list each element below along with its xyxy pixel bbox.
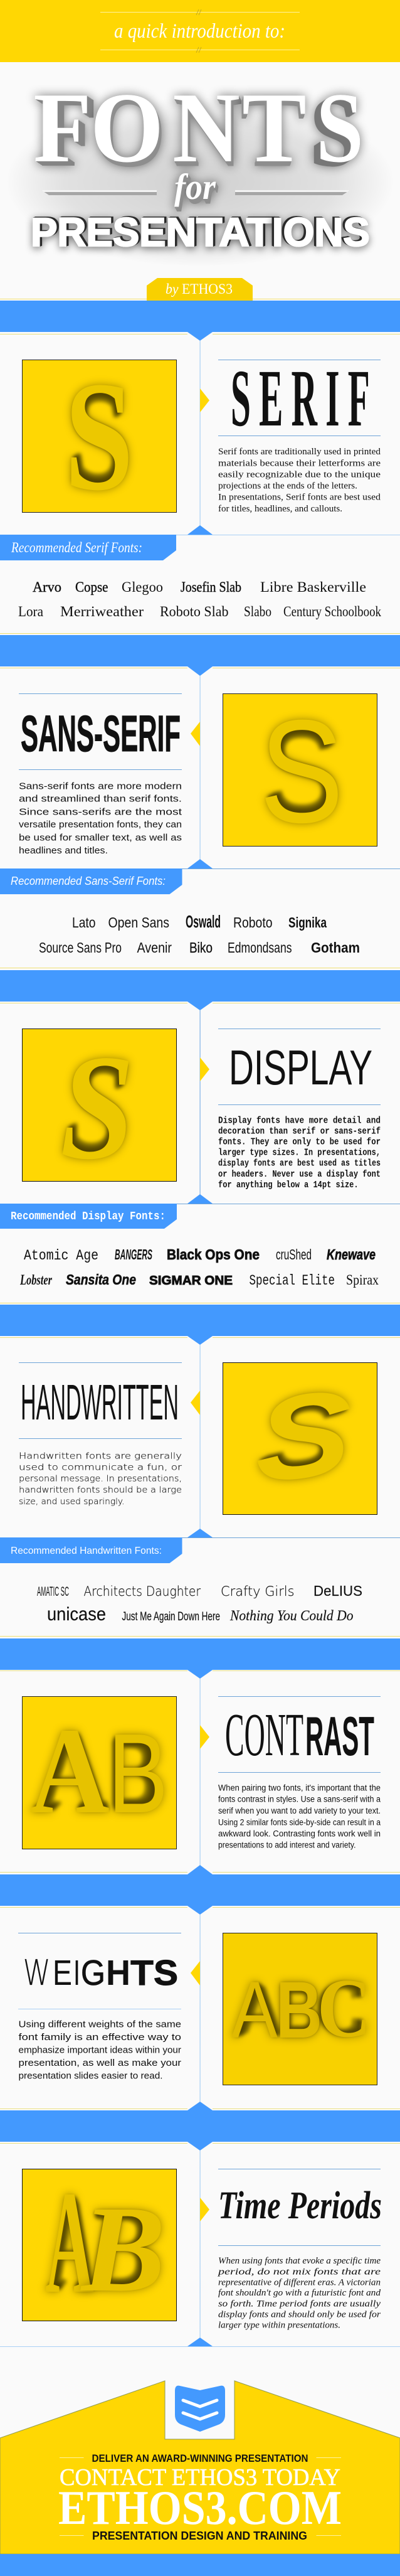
recommended handwritten band <box>0 1537 182 1563</box>
heading: weights: E <box>53 1953 72 1993</box>
weights description: Using different weights of the same <box>19 2020 181 2030</box>
time periods description: so forth. Time period fonts are usually <box>218 2299 381 2309</box>
tile: weights ABC: A <box>235 1967 279 2053</box>
main title: fonts for presentations <box>6 72 394 267</box>
display font samples: Special Elite <box>250 1273 335 1289</box>
time periods description <box>218 2256 381 2331</box>
tile: time periods AB: A <box>55 2174 95 2311</box>
title word FONTS: T <box>242 72 307 183</box>
panel: display <box>23 1010 400 1204</box>
tile: weights ABC: C <box>315 1970 360 2048</box>
sans-serif font samples: Roboto <box>233 914 272 931</box>
handwritten description <box>19 1451 182 1507</box>
display font samples: Knewave <box>327 1246 376 1263</box>
serif description: Serif fonts are traditionally used in printed <box>218 447 381 457</box>
blue band 4 <box>0 1305 400 1345</box>
tile: weights ABC: A <box>243 1972 282 2048</box>
heading: weights: W <box>23 1953 51 1994</box>
tile: handwritten S <box>223 1363 377 1515</box>
serif font samples: Josefin Slab <box>181 579 241 595</box>
sans-serif description: Since sans-serifs are the most <box>19 807 182 817</box>
display description: Display fonts have more detail and <box>218 1116 381 1126</box>
title word FONTS <box>33 72 364 183</box>
contrast description: When pairing two fonts, it's important that the <box>218 1783 381 1792</box>
footer blue strip <box>0 2554 400 2576</box>
sans-serif font samples: Source Sans Pro <box>39 939 122 956</box>
tile: contrast AB: A <box>42 1715 108 1827</box>
tile: weights ABC: B <box>277 1967 321 2053</box>
serif font samples: Libre Baskerville <box>260 579 366 595</box>
tile: handwritten S: S <box>259 1369 348 1503</box>
time periods description: larger type within presentations. <box>218 2321 340 2331</box>
serif description: for titles, headlines, and callouts. <box>218 504 342 514</box>
heading: weights <box>18 1933 181 2009</box>
serif font samples: Glegoo <box>122 579 163 595</box>
title word for: for <box>174 166 216 207</box>
tile: handwritten S: S <box>256 1365 351 1508</box>
recommended handwritten band: Recommended Handwritten Fonts: <box>11 1546 162 1556</box>
time periods description: font shouldn't go with a futuristic font and <box>218 2288 381 2298</box>
sans-serif description: Sans-serif fonts are more modern <box>19 781 182 791</box>
tile: contrast AB <box>23 1697 177 1849</box>
pointer arrow <box>191 1961 200 1985</box>
sans-serif font samples: Open Sans <box>108 914 169 931</box>
title word PRESENTATIONS: NTAT <box>166 210 272 255</box>
pointer arrow <box>200 2198 209 2221</box>
tile: contrast AB: A <box>34 1707 109 1836</box>
title divider bars <box>41 190 350 195</box>
heading: weights: G <box>81 1953 105 1993</box>
handwritten description: handwritten fonts should be a large <box>19 1485 182 1495</box>
sans-serif font samples: Oswald <box>186 912 221 931</box>
tile: display S: S <box>63 1029 132 1185</box>
title word FONTS: S <box>316 72 364 183</box>
blue band 3 <box>0 970 400 1010</box>
handwritten font samples: unicase <box>47 1604 106 1625</box>
contrast description: fonts contrast in styles. Use a sans-serif with a <box>218 1795 381 1804</box>
serif font samples <box>18 579 381 619</box>
handwritten description: size, and used sparingly. <box>19 1497 125 1507</box>
handwritten font samples: Architects Daughter <box>84 1584 201 1599</box>
tile: display S <box>23 1023 177 1190</box>
tile: time periods AB: B <box>84 2191 155 2306</box>
sans-serif font samples: Biko <box>189 939 213 956</box>
tile: display S: S <box>60 1023 134 1190</box>
display font samples: BANGERS <box>115 1246 152 1263</box>
contrast description: awkward look. Contrasting fonts work well in <box>218 1829 381 1839</box>
recommended display band: Recommended Display Fonts: <box>11 1211 166 1223</box>
pointer arrow <box>200 1057 209 1081</box>
pointer arrow <box>191 722 200 746</box>
tile: display S: S <box>68 1040 127 1173</box>
panel: weights <box>18 1915 377 2102</box>
serif description: easily recognizable due to the unique <box>218 470 381 480</box>
heading: sans-serif: SANS-SERIF <box>21 705 181 762</box>
serif font samples: Merriweather <box>60 604 144 619</box>
tile: sans-serif S <box>223 689 377 853</box>
tile: weights ABC <box>223 1933 377 2085</box>
display description: for anything below a 14pt size. <box>218 1180 359 1190</box>
tile: time periods AB: B <box>82 2184 162 2314</box>
contrast description: Using 2 similar fonts side-by-side can result in a <box>218 1817 381 1827</box>
sans-serif font samples: Gotham <box>311 939 360 956</box>
serif description: projections at the ends of the letters. <box>218 481 357 491</box>
panel: handwritten: HANDWRITTEN <box>21 1374 179 1430</box>
blue band 5 <box>0 1638 400 1679</box>
handwritten font samples: Just Me Again Down Here <box>122 1610 220 1623</box>
serif font samples: Arvo <box>33 579 61 595</box>
display font samples: cruShed <box>276 1246 312 1263</box>
tile: handwritten S: S <box>265 1379 342 1494</box>
blue band 6 <box>0 1865 400 1915</box>
display description <box>218 1116 381 1190</box>
header banner <box>0 0 400 62</box>
title word PRESENTATIONS <box>31 210 370 255</box>
sans-serif description: versatile presentation fonts, they can <box>19 820 182 830</box>
tile: weights ABC: A <box>238 1970 280 2050</box>
tile: weights ABC: B <box>276 1965 322 2055</box>
handwritten description: used to communicate a fun, or <box>19 1462 182 1472</box>
blue band 2 <box>0 635 400 676</box>
recommended sans-serif band: Recommended Sans-Serif Fonts: <box>11 875 166 887</box>
time periods description: When using fonts that evoke a specific time <box>218 2256 381 2266</box>
handwritten font samples: Crafty Girls <box>221 1584 295 1599</box>
tile: weights ABC: B <box>280 1972 319 2048</box>
time periods description: period, do not mix fonts that are <box>218 2267 381 2277</box>
display font samples: Lobster <box>19 1272 53 1288</box>
serif font samples: Century Schoolbook <box>283 604 381 619</box>
pointer arrow <box>191 1391 200 1415</box>
display font samples: Sansita One <box>66 1271 136 1288</box>
tile: serif S <box>23 350 177 523</box>
tile: weights ABC: A <box>231 1965 278 2055</box>
tile: time periods AB: A <box>45 2161 94 2324</box>
sans-serif font samples: Edmondsans <box>228 939 292 956</box>
tile: weights ABC: C <box>317 1962 371 2055</box>
tile: serif S: S <box>65 350 134 523</box>
recommended serif band <box>0 535 176 560</box>
tile: serif S: S <box>66 355 132 518</box>
recommended display band <box>0 1204 177 1229</box>
panel: time periods <box>0 2151 400 2347</box>
footer line: deliver: DELIVER AN AWARD-WINNING PRESENTATION <box>92 2452 308 2464</box>
title word FONTS: O <box>90 72 164 183</box>
panel: sans-serif <box>19 676 400 869</box>
weights description: presentation slides easier to read. <box>19 2071 163 2082</box>
tile: sans-serif S: S <box>265 700 338 843</box>
serif description: materials because their letterforms are <box>218 458 381 468</box>
time periods description: display fonts and should only be used for <box>218 2309 381 2319</box>
sans-serif font samples <box>39 912 360 956</box>
sans-serif font samples: Lato <box>72 914 95 931</box>
tile: time periods AB: B <box>80 2180 166 2317</box>
display font samples: Atomic Age <box>24 1248 98 1264</box>
title word PRESENTATIONS: IONS <box>272 210 370 255</box>
time periods description: representative of different eras. A victorian <box>218 2278 381 2288</box>
handwritten font samples: DeLIUS <box>313 1583 362 1599</box>
footer line: contact: CONTACT ETHOS3 TODAY <box>60 2464 340 2491</box>
tile: time periods AB <box>23 2161 177 2324</box>
recommended sans-serif band <box>0 868 182 894</box>
serif description <box>218 447 381 514</box>
footer line: tagline: PRESENTATION DESIGN AND TRAINING <box>92 2530 307 2542</box>
sans-serif font samples: Signika <box>288 914 327 931</box>
blue band 1 <box>0 301 400 341</box>
tile: contrast AB: B <box>107 1714 164 1832</box>
tile: serif S: S <box>69 361 129 512</box>
display font samples: Black Ops One <box>167 1246 260 1263</box>
tile: time periods AB: A <box>51 2169 95 2316</box>
handwritten font samples: Nothing You Could Do <box>229 1608 354 1623</box>
sans-serif description: headlines and titles. <box>19 846 108 856</box>
contrast description <box>218 1783 381 1850</box>
tile: serif S: S <box>71 367 127 506</box>
tile: sans-serif S: S <box>262 694 341 848</box>
tile: contrast AB: B <box>108 1711 168 1837</box>
weights description: presentation, as well as make your <box>19 2058 181 2068</box>
tile: sans-serif S: S <box>260 689 344 853</box>
tile: contrast AB: B <box>106 1722 155 1825</box>
sans-serif description: and streamlined than serif fonts. <box>19 794 182 804</box>
byline tab <box>147 278 253 301</box>
tile: display S: S <box>65 1035 129 1180</box>
blue band 7 <box>0 2102 400 2151</box>
panel: handwritten <box>19 1345 400 1538</box>
tile: sans-serif S: S <box>268 706 335 837</box>
tile: contrast AB: A <box>38 1711 108 1831</box>
heading: weights: I <box>73 1953 80 1993</box>
tile: weights ABC: C <box>317 1964 367 2053</box>
handwritten description: Handwritten fonts are generally <box>19 1451 182 1461</box>
handwritten description: personal message. In presentations, <box>19 1474 182 1484</box>
handwritten font samples <box>37 1583 362 1625</box>
display font samples: Spirax <box>346 1272 379 1288</box>
tile: time periods AB: A <box>48 2165 95 2320</box>
byline tab: by ETHOS3 <box>166 281 233 297</box>
weights description: emphasize important ideas within your <box>19 2046 181 2056</box>
display font samples <box>19 1246 379 1289</box>
handwritten font samples: AMATIC SC <box>37 1585 69 1599</box>
tile: contrast AB: B <box>107 1718 160 1829</box>
weights description <box>19 2020 181 2082</box>
tile: contrast AB: A <box>29 1702 110 1839</box>
sans-serif description <box>19 781 182 856</box>
serif font samples: Lora <box>18 604 43 619</box>
tile: time periods AB: B <box>82 2188 159 2311</box>
panel: serif <box>23 341 400 535</box>
serif font samples: Copse <box>75 579 108 595</box>
recommended serif band: Recommended Serif Fonts: <box>11 540 142 555</box>
title word FONTS: N <box>172 72 240 183</box>
pointer arrow <box>200 388 209 412</box>
panel: contrast <box>23 1679 381 1866</box>
sans-serif description: be used for smaller text, as well as <box>19 833 182 843</box>
pointer arrow <box>200 1725 209 1749</box>
tile: weights ABC: B <box>278 1970 320 2050</box>
weights description: font family is an effective way to <box>19 2033 181 2043</box>
title word FONTS: F <box>33 72 92 183</box>
serif font samples: Slabo <box>244 604 271 619</box>
heading: weights: H <box>106 1953 130 1993</box>
header text: a quick introduction to: <box>114 20 285 43</box>
footer call to action <box>0 2381 400 2554</box>
tile: handwritten S: S <box>262 1374 345 1499</box>
contrast description: presentations to add interest and variety. <box>218 1841 356 1850</box>
sans-serif font samples: Avenir <box>137 939 172 956</box>
title word PRESENTATIONS: PRESE <box>31 210 166 255</box>
heading: weights: T <box>130 1953 154 1993</box>
icon: chevron shield logo <box>175 2386 225 2432</box>
serif description: In presentations, Serif fonts are best used <box>218 493 381 503</box>
serif font samples: Roboto Slab <box>160 604 228 619</box>
footer line: website: ETHOS3.COM <box>58 2481 342 2535</box>
contrast description: serif when you want to add variety to your text. <box>218 1806 381 1815</box>
heading: contrast: CONT <box>225 1701 303 1768</box>
display font samples: SIGMAR ONE <box>149 1274 233 1288</box>
tile: weights ABC: C <box>315 1967 364 2051</box>
heading: weights: S <box>154 1953 178 1993</box>
